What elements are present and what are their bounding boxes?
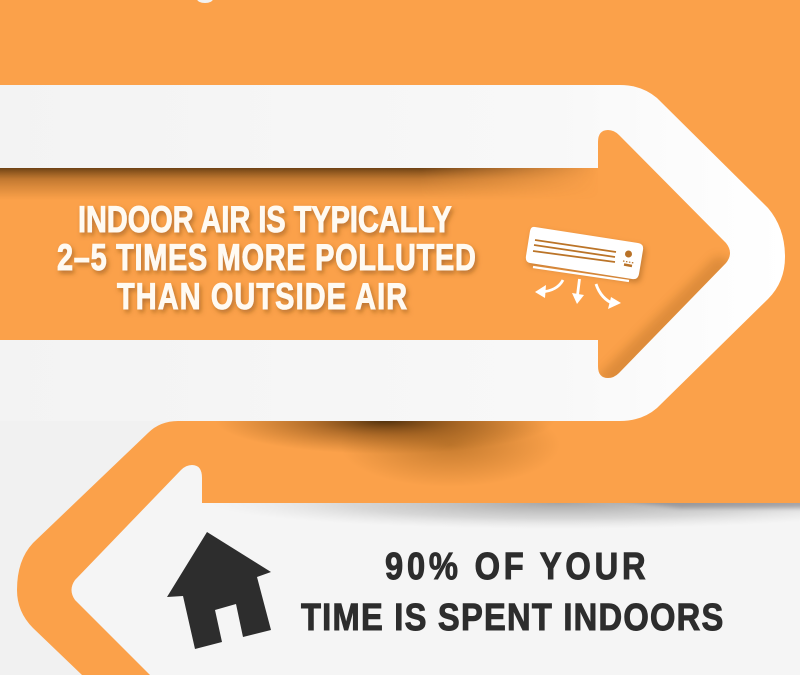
heading: time indoors text xyxy=(301,545,723,639)
top cut-off white mark xyxy=(197,0,213,3)
panel: orange lower arrow xyxy=(17,421,544,675)
heading: indoor air text: 2–5 TIMES MORE POLLUTED xyxy=(57,238,476,279)
icon: house xyxy=(167,532,271,649)
panel: white home arrow xyxy=(72,465,800,675)
heading: time indoors text: 90% OF YOUR xyxy=(385,545,646,588)
panel: orange indoor air arrow xyxy=(0,130,736,386)
heading: indoor air text xyxy=(57,200,476,318)
white arrow band xyxy=(0,85,785,421)
heading: time indoors text: TIME IS SPENT INDOORS xyxy=(301,596,723,639)
heading: indoor air text: INDOOR AIR IS TYPICALLY xyxy=(78,200,452,241)
heading: indoor air text: THAN OUTSIDE AIR xyxy=(117,277,407,318)
icon: air conditioner xyxy=(526,227,643,309)
grey lower-left background xyxy=(0,330,300,675)
